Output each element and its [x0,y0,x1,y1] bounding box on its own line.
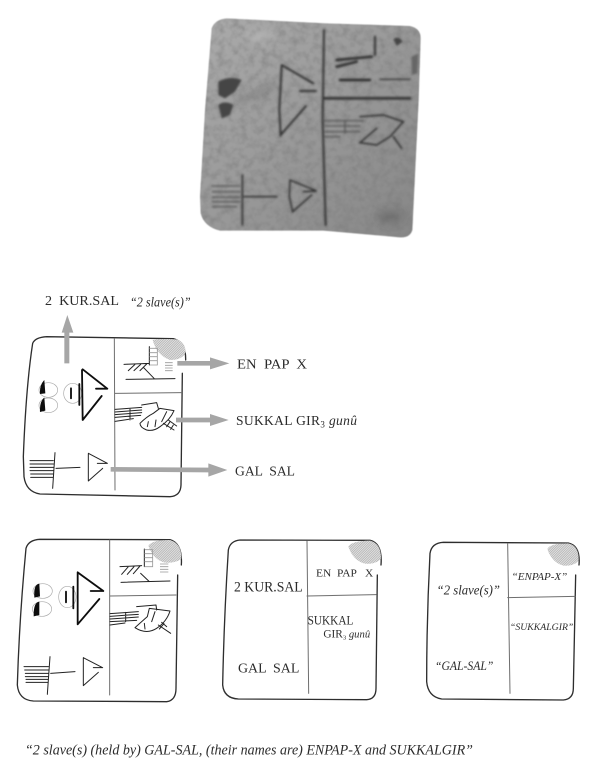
text: GAL-SAL: “GAL-SAL” [435,659,493,673]
label: 2 KUR.SAL 2 slaves: “2 slave(s)” [130,296,191,311]
text: GAL SAL: GAL SAL [238,660,299,675]
text: GIR3 gunû: gunû [346,630,370,641]
label: 2 KUR.SAL 2 slaves [45,293,191,311]
text: GIR3 gunû: GIR [323,629,343,641]
arrow: up to KUR.SAL [62,315,73,363]
text: ENPAP-X: “ENPAP-X” [512,572,567,583]
arrow: to GAL SAL [111,463,227,477]
hatched corner [348,541,381,564]
text: SUKKALGIR: “SUKKALGIR” [510,623,573,633]
label: SUKKAL GIR3 gunû: gunû [325,413,357,428]
tablet outline [23,337,186,497]
sign: SUKKAL GIR3 [115,403,177,430]
sign: SUKKAL GIR3 [110,605,171,633]
panel: translation [427,542,579,700]
panel: tablet signs copy [17,539,181,702]
sign: EN PAP X [120,549,170,582]
text: GIR3 gunû: 3 [343,635,347,642]
sign: KUR.SAL [39,369,107,420]
label: SUKKAL GIR3 gunû: SUKKAL GIR [236,413,320,428]
hatched corner [148,540,181,563]
dividers [110,540,176,695]
text: 2 KUR.SAL: 2 KUR.SAL [234,580,303,596]
tablet outline [223,540,381,700]
text: 2 slaves: “2 slave(s)” [437,582,500,598]
dividers [307,541,376,693]
panel: transliteration [223,540,381,700]
label: EN PAP X: EN PAP X [237,356,307,372]
text: SUKKAL: SUKKAL [308,613,353,627]
sign: GAL SAL [24,657,103,694]
arrow: to SUKKAL GIR3 [176,414,229,426]
tablet outline [427,542,579,700]
column and row dividers [114,338,182,490]
dividers [508,543,575,693]
label: GAL SAL: GAL SAL [235,464,295,478]
tablet outline [17,539,181,702]
sign: GAL SAL [30,453,107,488]
diagram: annotated tablet drawing with arrows [23,315,229,497]
hatched corner [547,543,579,566]
photo: clay tablet [200,18,421,237]
arrow: to EN PAP X [177,357,229,369]
sign: KUR.SAL [32,572,103,624]
hatched damaged corner [153,339,186,360]
text: EN PAP X: EN PAP X [316,568,373,580]
label: 2 KUR.SAL 2 slaves: 2 KUR.SAL [45,293,119,308]
caption: full translation: “2 slave(s) (held by) GAL-SAL, (their names are) ENPAP-X and SUKKALGIR” [25,742,473,758]
sign: EN PAP X [124,347,175,379]
label: SUKKAL GIR3 gunû: 3 [320,420,325,430]
